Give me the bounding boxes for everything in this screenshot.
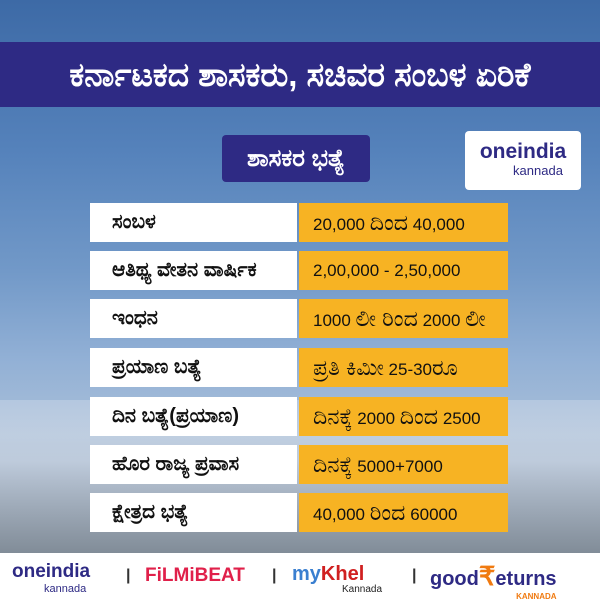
logo: oneindia kannada: kannada (513, 163, 563, 178)
row 3: 1000 ಲೀ ರಿಂದ 2000 ಲೀ (313, 306, 486, 331)
footer logos: FiLMiBEAT (145, 565, 245, 586)
subtitle box (222, 135, 370, 182)
row 1 (90, 203, 508, 242)
row 2: 2,00,000 - 2,50,000 (313, 261, 460, 280)
footer logos: kannada (44, 583, 86, 595)
footer logos: oneindia (12, 561, 90, 582)
logo: oneindia kannada (465, 131, 581, 190)
row 6 (90, 445, 508, 484)
footer logos (0, 553, 600, 604)
row 1: ಸಂಬಳ (112, 211, 156, 233)
row 2 (90, 251, 508, 290)
row 6: ಹೊರ ರಾಜ್ಯ ಪ್ರವಾಸ (112, 453, 239, 475)
title bar: ಕರ್ನಾಟಕದ ಶಾಸಕರು, ಸಚಿವರ ಸಂಬಳ ಏರಿಕೆ (69, 56, 531, 93)
row 4 (90, 348, 508, 387)
row 3: ಇಂಧನ (112, 307, 158, 329)
row 7 (90, 493, 508, 532)
footer logos: myKhel (292, 563, 364, 585)
footer logos: | (126, 567, 130, 584)
row 4: ಪ್ರಯಾಣ ಬತ್ಯೆ (112, 356, 202, 378)
row 2: ಆತಿಥ್ಯ ವೇತನ ವಾರ್ಷಿಕ (112, 259, 257, 281)
title bar (0, 42, 600, 107)
row 7: ಕ್ಷೇತ್ರದ ಭತ್ಯೆ (112, 501, 188, 523)
row 3 (90, 299, 508, 338)
building silhouette (0, 400, 600, 553)
footer logos: good₹eturns (430, 561, 557, 591)
footer logos: KANNADA (516, 592, 557, 601)
row 7: 40,000 ರಿಂದ 60000 (313, 500, 457, 525)
footer logos: | (272, 567, 276, 584)
row 6: ದಿನಕ್ಕೆ 5000+7000 (313, 452, 443, 477)
row 1: 20,000 ದಿಂದ 40,000 (313, 210, 465, 235)
subtitle box: ಶಾಸಕರ ಭತ್ಯೆ (247, 145, 345, 172)
footer logos: Kannada (342, 584, 382, 595)
row 5: ದಿನಕ್ಕೆ 2000 ದಿಂದ 2500 (313, 404, 481, 429)
logo: oneindia kannada: oneindia (480, 140, 566, 163)
footer logos: | (412, 567, 416, 584)
row 5 (90, 397, 508, 436)
row 4: ಪ್ರತಿ ಕಿಮೀ 25-30ರೂ (313, 355, 458, 380)
row 5: ದಿನ ಬತ್ಯೆ(ಪ್ರಯಾಣ) (112, 405, 239, 427)
